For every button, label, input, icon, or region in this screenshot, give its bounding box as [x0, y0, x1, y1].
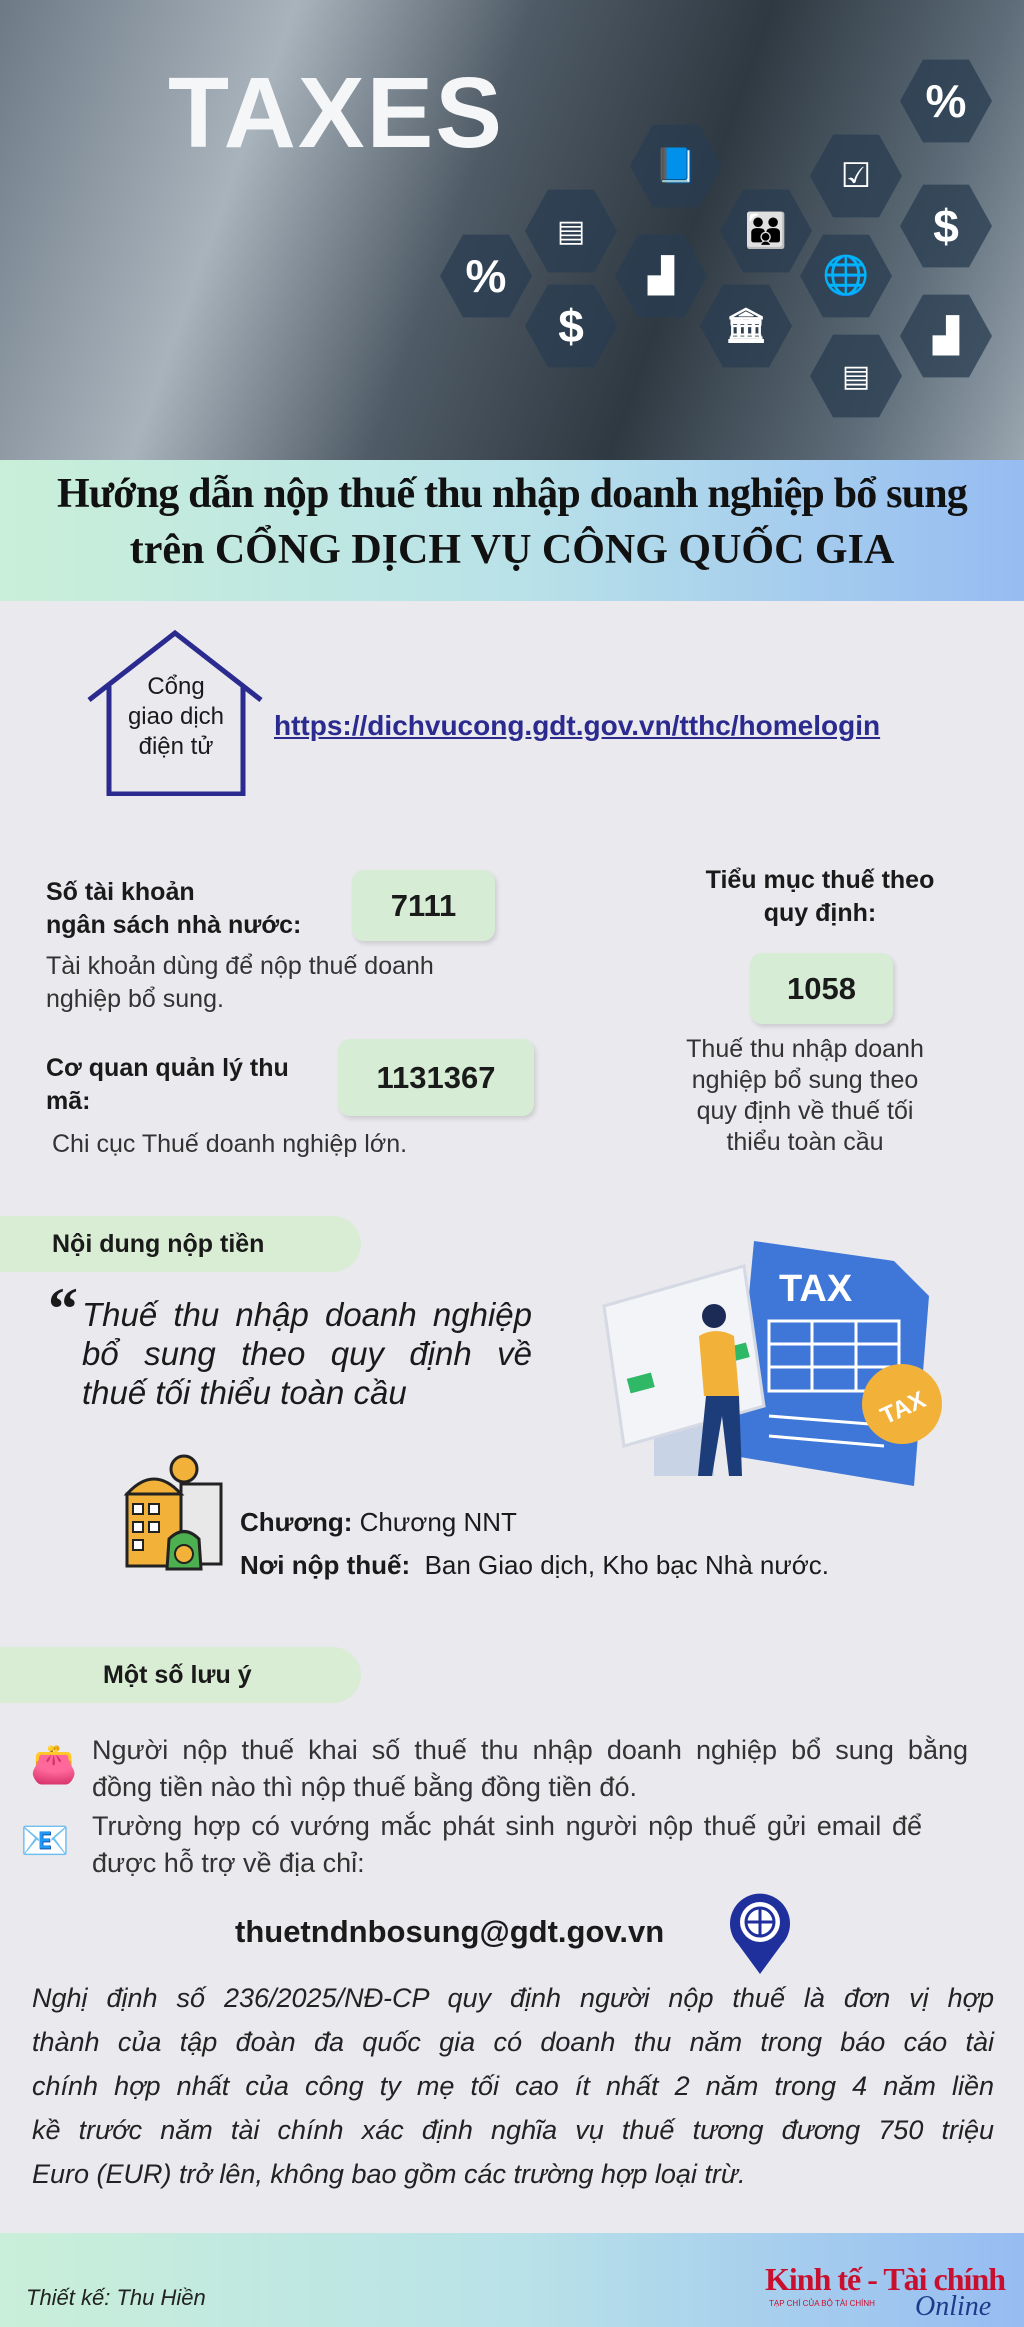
icon hexagons: $ [933, 200, 959, 252]
icon: location globe [730, 1894, 790, 1974]
note 1: đồng tiền nào thì nộp thuế bằng đồng tiền đó. [92, 1772, 637, 1802]
chapter text: Chương: Chương NNT [240, 1507, 517, 1537]
box 1058: 1058 [787, 970, 856, 1006]
pill: Một số lưu ý [0, 1647, 361, 1703]
icon: wallet money: 👛 [30, 1744, 77, 1786]
icon: house portal: Cổng [147, 673, 205, 700]
quote [48, 1276, 532, 1411]
note 2: được hỗ trợ về địa chỉ: [92, 1848, 365, 1878]
illustration: tax document: TAX [877, 1386, 930, 1430]
footer [0, 2233, 1024, 2327]
icon hexagons: 👪 [745, 212, 787, 250]
icon: bank with money [124, 1454, 222, 1570]
pill: Một số lưu ý: Một số lưu ý [103, 1660, 252, 1688]
chapter text [240, 1507, 829, 1580]
icon hexagons: ▤ [842, 360, 870, 392]
illustration: tax document: TAX [779, 1268, 853, 1310]
account desc [46, 952, 434, 1013]
box 1131367 [338, 1039, 534, 1116]
agency label: mã: [46, 1087, 90, 1115]
account label [46, 878, 301, 939]
pill: Nội dung nộp tiền: Nội dung nộp tiền [52, 1230, 264, 1258]
icon: house portal: giao dịch [128, 703, 224, 730]
title: TAXES: TAXES [168, 57, 504, 169]
logo: TẠP CHÍ CỦA BỘ TÀI CHÍNH [769, 2299, 875, 2308]
decree paragraph: Nghị định số 236/2025/NĐ-CP quy định người nộp thuế là đơn vị hợp [32, 1983, 994, 2013]
sub-item label: quy định: [764, 899, 876, 927]
icon hexagons: % [926, 75, 966, 127]
sub-item desc: quy định về thuế tối [697, 1097, 913, 1125]
note 2: Trường hợp có vướng mắc phát sinh người nộp thuế gửi email để [92, 1811, 922, 1841]
pill: Nội dung nộp tiền [0, 1216, 361, 1272]
note 2 [92, 1811, 922, 1878]
agency label: Cơ quan quản lý thu [46, 1054, 289, 1082]
header photo [0, 0, 1024, 460]
icon: house portal [88, 630, 262, 796]
icon hexagons: 🏛 [724, 307, 768, 345]
decree paragraph: chính hợp nhất của công ty mẹ tối cao ít nhất 2 năm trong 4 năm liền [32, 2071, 994, 2101]
account desc: Tài khoản dùng để nộp thuế doanh [46, 952, 434, 980]
sub-item desc: thiểu toàn cầu [726, 1128, 884, 1156]
box 7111: 7111 [391, 888, 456, 922]
logo [765, 2261, 1006, 2322]
note 1: Người nộp thuế khai số thuế thu nhập doanh nghiệp bổ sung bằng [92, 1735, 968, 1765]
account label: ngân sách nhà nước: [46, 911, 301, 939]
sub-item label: Tiểu mục thuế theo [706, 866, 934, 894]
decree paragraph: thành của tập đoàn đa quốc gia có doanh thu năm trong báo cáo tài [32, 2027, 994, 2057]
account desc: nghiệp bổ sung. [46, 985, 224, 1013]
sub-item desc: Thuế thu nhập doanh [686, 1035, 924, 1063]
icon hexagons: 🌐 [822, 255, 870, 297]
icon hexagons: $ [558, 300, 584, 352]
sub-item desc [686, 1035, 924, 1156]
icon hexagons: ▟ [648, 257, 674, 295]
quote: thuế tối thiểu toàn cầu [82, 1374, 407, 1411]
sub-item desc: nghiệp bổ sung theo [692, 1066, 918, 1094]
designer credit: Thiết kế: Thu Hiền [26, 2285, 206, 2310]
sub-item label [706, 866, 934, 927]
agency desc: Chi cục Thuế doanh nghiệp lớn. [52, 1130, 407, 1158]
decree paragraph: Euro (EUR) trở lên, không bao gồm các trường hợp loại trừ. [32, 2159, 745, 2189]
quote: bổ sung theo quy định về [82, 1335, 532, 1372]
icon hexagons: ▟ [933, 317, 959, 355]
quote: Thuế thu nhập doanh nghiệp [82, 1296, 532, 1333]
logo: Kinh tế - Tài chính [765, 2261, 1005, 2297]
email: thuetndnbosung@gdt.gov.vn [235, 1914, 664, 1949]
icon hexagons: % [466, 250, 506, 302]
icon: email: 📧 [20, 1819, 70, 1863]
note 1 [92, 1735, 968, 1802]
icon: house portal: điện tử [139, 733, 213, 760]
box 1131367: 1131367 [376, 1060, 495, 1094]
account label: Số tài khoản [46, 878, 195, 906]
box 1058 [750, 953, 893, 1024]
illustration: tax document [602, 1241, 942, 1486]
icon hexagons [440, 60, 992, 418]
quote: “ [48, 1276, 78, 1342]
decree paragraph: kề trước năm tài chính xác định nghĩa vụ thuế tương đương 750 triệu [32, 2115, 994, 2145]
link: https://dichvucong.gdt.gov.vn/tthc/homelogin [274, 710, 880, 741]
icon hexagons: ☑ [841, 157, 871, 195]
icon hexagons: ▤ [557, 214, 585, 248]
box 7111 [352, 870, 495, 941]
title band: Hướng dẫn nộp thuế thu nhập doanh nghiệp bổ sung [57, 471, 967, 517]
title band: trên CỔNG DỊCH VỤ CÔNG QUỐC GIA [130, 527, 894, 573]
agency label [46, 1054, 289, 1115]
icon hexagons: 📘 [655, 147, 697, 185]
decree paragraph [32, 1983, 995, 2189]
title band [0, 460, 1024, 601]
logo: Online [915, 2291, 991, 2322]
chapter text: Nơi nộp thuế: Ban Giao dịch, Kho bạc Nhà nước. [240, 1550, 829, 1580]
